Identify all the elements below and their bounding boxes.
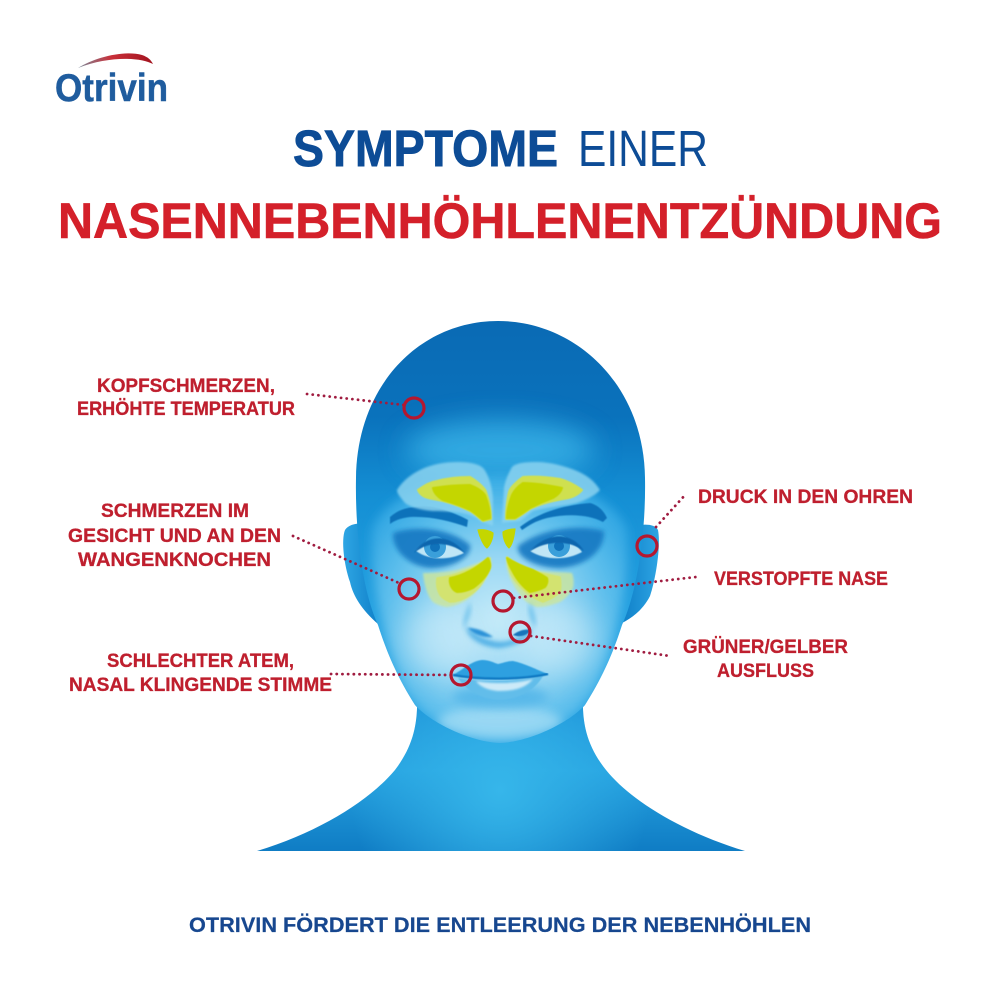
logo: Otrivin <box>55 53 168 110</box>
label: Kopfschmerzen: KOPFSCHMERZEN, <box>97 376 275 397</box>
marker: cheek <box>399 579 419 599</box>
logo: Otrivin: Otrivin <box>55 67 168 110</box>
title: EINER <box>578 120 708 177</box>
label: Schlechter Atem: NASAL KLINGENDE STIMME <box>69 675 332 696</box>
face shading <box>372 420 628 744</box>
label: Kopfschmerzen <box>77 376 295 420</box>
marker: forehead <box>404 398 424 418</box>
right ear <box>622 525 659 623</box>
label: Grüner/gelber Ausfluss: AUSFLUSS <box>717 661 814 682</box>
label: Schmerzen im Gesicht: SCHMERZEN IM <box>101 501 249 522</box>
label: Grüner/gelber Ausfluss <box>683 637 848 682</box>
sinus: ethmoid right <box>503 529 515 548</box>
sinus: frontal right <box>502 462 600 523</box>
label: Schmerzen im Gesicht <box>68 501 281 571</box>
label: Kopfschmerzen: ERHÖHTE TEMPERATUR <box>77 399 295 420</box>
label: Druck in den Ohren: DRUCK IN DEN OHREN <box>698 487 913 508</box>
marker: nostril <box>510 622 530 642</box>
right eyebrow <box>520 503 607 530</box>
left eye shadow <box>393 529 470 568</box>
right eye shadow <box>518 528 604 568</box>
sinus: ethmoid left <box>478 530 493 548</box>
sinus: maxillary right <box>506 557 574 607</box>
label: Schmerzen im Gesicht: WANGENKNOCHEN <box>78 550 271 571</box>
sinus: frontal left <box>397 462 493 526</box>
dotted leader lines <box>293 394 696 675</box>
label: Schmerzen im Gesicht: GESICHT UND AN DEN <box>68 526 281 547</box>
left eye <box>414 536 465 558</box>
label: Schlechter Atem <box>69 651 332 696</box>
left eyebrow <box>390 506 468 527</box>
marker: mouth <box>451 665 471 685</box>
marker: ear <box>637 536 657 556</box>
illustration: blue head <box>257 321 745 851</box>
sinus: maxillary left <box>423 557 492 607</box>
title <box>58 120 942 249</box>
right eye <box>529 535 584 558</box>
head shape <box>356 321 645 743</box>
label: Schlechter Atem: SCHLECHTER ATEM, <box>107 651 294 672</box>
footer statement: OTRIVIN FÖRDERT DIE ENTLEERUNG DER NEBENHÖHLEN <box>189 914 811 937</box>
title: SYMPTOME <box>293 120 558 177</box>
label: Verstopfte Nase: VERSTOPFTE NASE <box>714 569 888 590</box>
neck and shoulders <box>257 695 745 851</box>
left ear <box>343 523 378 624</box>
lips <box>452 660 548 709</box>
marker: nose bridge <box>493 591 513 611</box>
nose <box>463 602 536 648</box>
title: NASENNEBENHÖHLENENTZÜNDUNG <box>58 193 942 249</box>
label: Grüner/gelber Ausfluss: GRÜNER/GELBER <box>683 637 848 658</box>
